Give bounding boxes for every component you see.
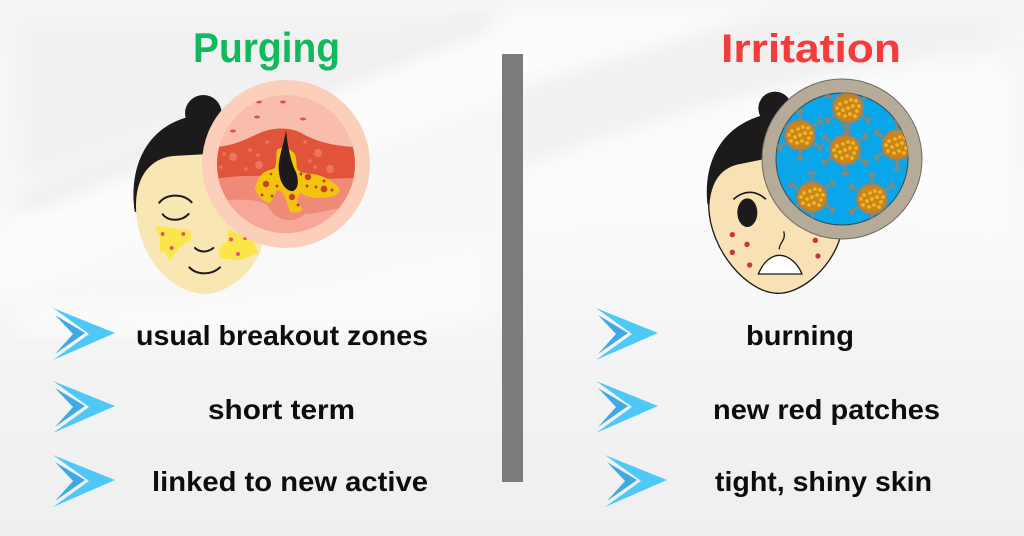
blackhead (279, 130, 298, 191)
magnified skin circle (202, 80, 370, 248)
text: usual breakout zones: usual breakout zones (136, 320, 428, 351)
nose (779, 231, 784, 249)
arrow icon (53, 381, 115, 433)
open eye and brow (737, 198, 757, 227)
hair and bun (707, 92, 797, 210)
right list: irritation traits (596, 308, 940, 507)
pus pocket (255, 148, 340, 213)
red spots (730, 232, 821, 268)
title: Purging: Purging (193, 24, 340, 71)
text: linked to new active: linked to new active (152, 466, 428, 497)
magnifier lens with microbes (762, 79, 922, 239)
surface spots (230, 100, 306, 132)
text: new red patches: new red patches (713, 394, 940, 425)
center divider bar (502, 54, 523, 482)
face (709, 153, 840, 293)
frowning mouth (758, 255, 802, 274)
hair and bun (133, 95, 227, 213)
arrow icon (53, 455, 115, 507)
text: burning: burning (746, 320, 854, 351)
red dermis layer (215, 128, 360, 190)
face (136, 153, 263, 294)
closed eye, nose and mouth (159, 196, 220, 273)
yellow cheek patches (155, 226, 258, 261)
illustration: irritated face (707, 92, 840, 293)
illustration: purging face (133, 95, 263, 294)
title: Irritation: Irritation (721, 27, 901, 71)
arrow icon (596, 381, 658, 433)
arrow icon (605, 455, 667, 507)
arrow icon (53, 308, 115, 360)
left list: purging traits (53, 308, 428, 507)
text: tight, shiny skin: tight, shiny skin (715, 466, 932, 497)
arrow icon (596, 308, 658, 360)
text: short term: short term (208, 394, 355, 425)
